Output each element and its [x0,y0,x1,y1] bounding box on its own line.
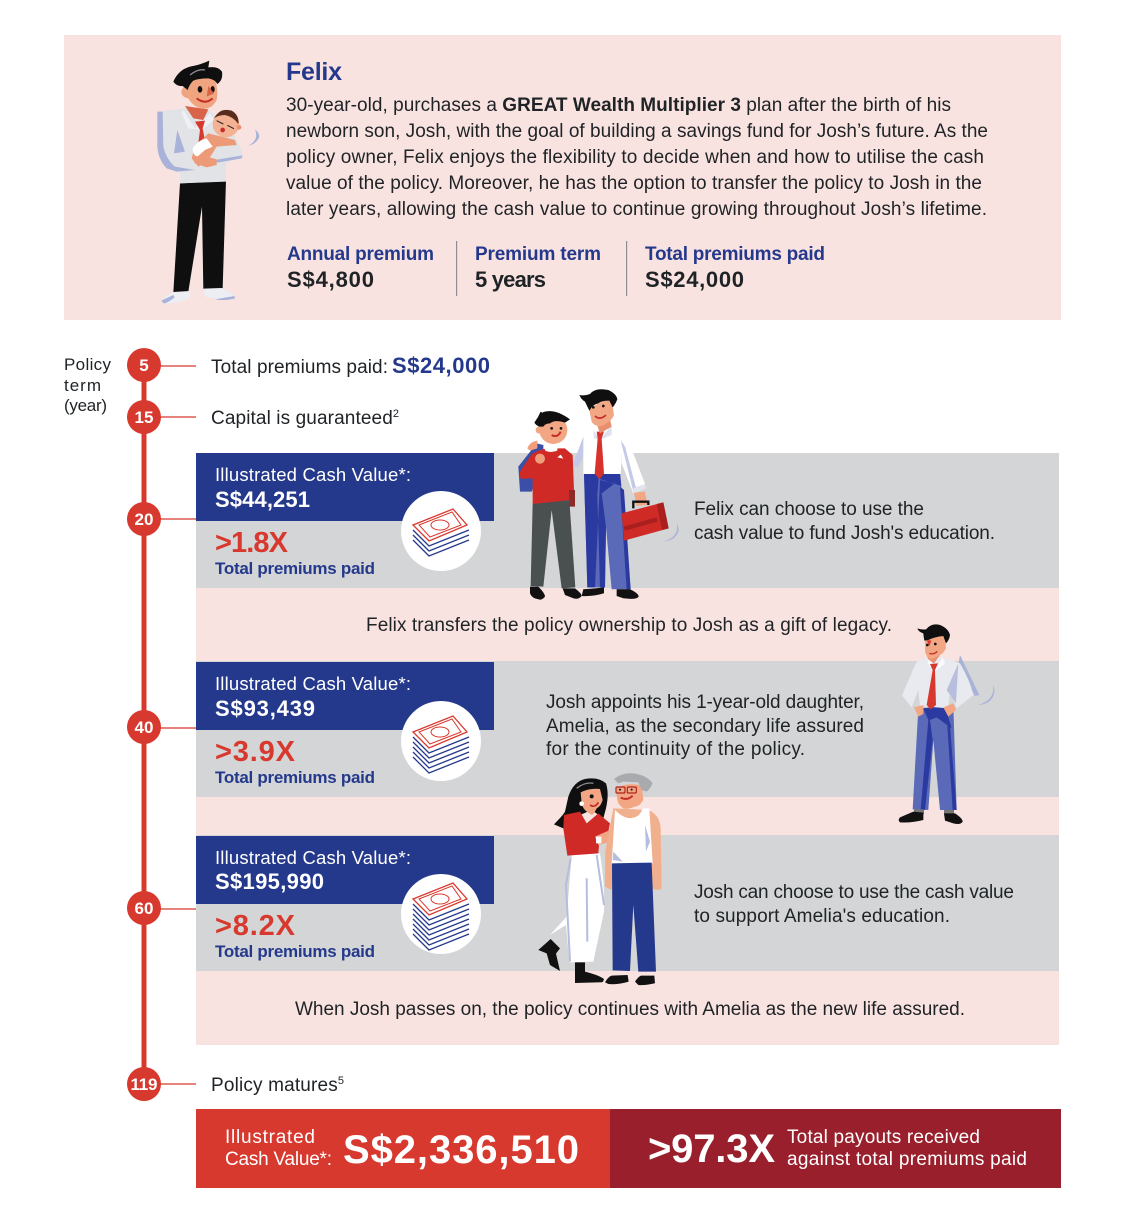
text block: Felix description: later years, allowing the cash value to continue growing throughout Josh’s lifetime. [286,199,987,220]
illustration: Felix holding baby [157,61,259,304]
panel: age 40 band [196,661,1059,797]
marker: year 60 [127,891,161,925]
text: Josh passes on: When Josh passes on, the policy continues with Amelia as the new life assured. [295,999,965,1020]
card: year 40 value: S$93,439 [215,696,315,721]
text: policy matures: 5 [338,1075,344,1087]
text: support Amelia's education [694,882,1014,927]
card: year 60 value: Illustrated Cash Value*: [215,847,411,868]
card: year 60 value: S$195,990 [215,869,324,894]
panel: Felix profile [64,35,1061,320]
text block: Felix description: value of the policy. Moreover, he has the option to transfer the policy to Josh in the [286,173,982,194]
text: total premiums paid at year 5 [211,353,490,378]
stat: annual premium [287,244,434,292]
text block: Felix description: 30-year-old, purchases a GREAT Wealth Multiplier 3 plan after the birth of his [286,95,951,116]
timeline [64,348,196,1101]
illustration: adult Josh, hands on hips [899,624,994,824]
panel: total payout multiple [610,1109,1061,1188]
marker: year 60: 60 [135,899,153,918]
text: capital guaranteed: 2 [393,408,399,420]
text: fund education: Felix can choose to use the [694,499,924,520]
card: year 20 value: Illustrated Cash Value*: [215,464,411,485]
panel: illustrated cash value at maturity: S$2,336,510 [343,1128,579,1172]
icon: cash stack (year 20) [401,491,481,571]
panel: Amelia new life assured band [196,971,1059,1045]
marker: year 15: 15 [135,408,153,427]
marker: year 40 [127,710,161,744]
text block: Felix description: newborn son, Josh, with the goal of building a savings fund for Josh’s future. As the [286,121,988,142]
card: year 20 value [196,453,494,578]
card: year 20 value: S$44,251 [215,487,310,512]
panel: pink gap band [196,797,1059,835]
panel: total payout multiple: >97.3X [648,1127,775,1171]
panel: illustrated cash value at maturity: Illustrated [225,1127,315,1148]
marker: year 119 [127,1067,161,1101]
panel: total payout multiple: Total payouts received [787,1127,980,1148]
marker: year 5: 5 [139,356,149,375]
panel: age 20 band [196,453,1059,588]
icon: cash stack (year 60) [401,874,481,954]
card: year 40 value: Total premiums paid [215,768,375,787]
text: total premiums paid at year 5: Total premiums paid: [211,357,388,378]
stat: premium term [475,244,601,292]
panel: illustrated cash value at maturity [196,1109,610,1188]
text block: Felix description [286,95,988,220]
text block: Felix description: policy owner, Felix enjoys the flexibility to decide when and how to utilise the cash [286,147,984,168]
card: year 60 value: Total premiums paid [215,942,375,961]
stat: total premiums paid: S$24,000 [645,267,744,292]
card: year 40 value [196,662,494,787]
stat: total premiums paid [645,244,825,292]
heading: Felix: Felix [286,58,342,86]
card: year 40 value: Illustrated Cash Value*: [215,673,411,694]
label: policy term (year): (year) [64,396,107,415]
text: appoints Amelia: Amelia, as the secondary life assured [546,716,864,737]
text: appoints Amelia: Josh appoints his 1-year-old daughter, [546,692,864,713]
text: support Amelia's education: to support Amelia's education. [694,906,950,927]
illustration: Amelia and elderly Josh [538,773,662,985]
text: appoints Amelia [546,692,864,760]
marker: year 15 [127,400,161,434]
text: support Amelia's education: Josh can choose to use the cash value [694,882,1014,903]
text: total premiums paid at year 5: S$24,000 [392,353,490,378]
text: Felix transfers ownership: Felix transfers the policy ownership to Josh as a gift of legacy. [366,615,892,636]
stat: premium term: Premium term [475,244,601,265]
text: capital guaranteed: Capital is guaranteed [211,408,393,429]
marker: year 20: 20 [135,510,153,529]
stat: premium term: 5 years [475,267,546,292]
text: fund education: cash value to fund Josh's education. [694,523,995,544]
stat: annual premium: S$4,800 [287,267,374,292]
stat: total premiums paid: Total premiums paid [645,244,825,265]
icon: cash stack (year 40) [401,701,481,781]
text: appoints Amelia: for the continuity of the policy. [546,739,805,760]
stat: annual premium: Annual premium [287,244,434,265]
marker: year 5 [127,348,161,382]
card: year 60 value: >8.2X [215,910,296,942]
label: policy term (year): term [64,376,101,395]
text: policy matures: Policy matures [211,1075,338,1096]
label: policy term (year): Policy [64,355,112,374]
panel: legacy transfer band [196,588,1059,661]
card: year 20 value: Total premiums paid [215,559,375,578]
marker: year 20 [127,502,161,536]
panel: total payout multiple: against total premiums paid [787,1149,1027,1170]
illustration: Felix and schoolboy Josh [518,389,678,600]
marker: year 119: 119 [130,1075,158,1094]
panel: illustrated cash value at maturity: Cash Value*: [225,1149,332,1170]
marker: year 40: 40 [135,718,153,737]
panel: age 60 band [196,835,1059,971]
card: year 40 value: >3.9X [215,736,296,768]
text: fund education [694,499,995,544]
label: policy term (year) [64,355,112,415]
card: year 20 value: >1.8X [215,527,289,559]
card: year 60 value [196,836,494,961]
